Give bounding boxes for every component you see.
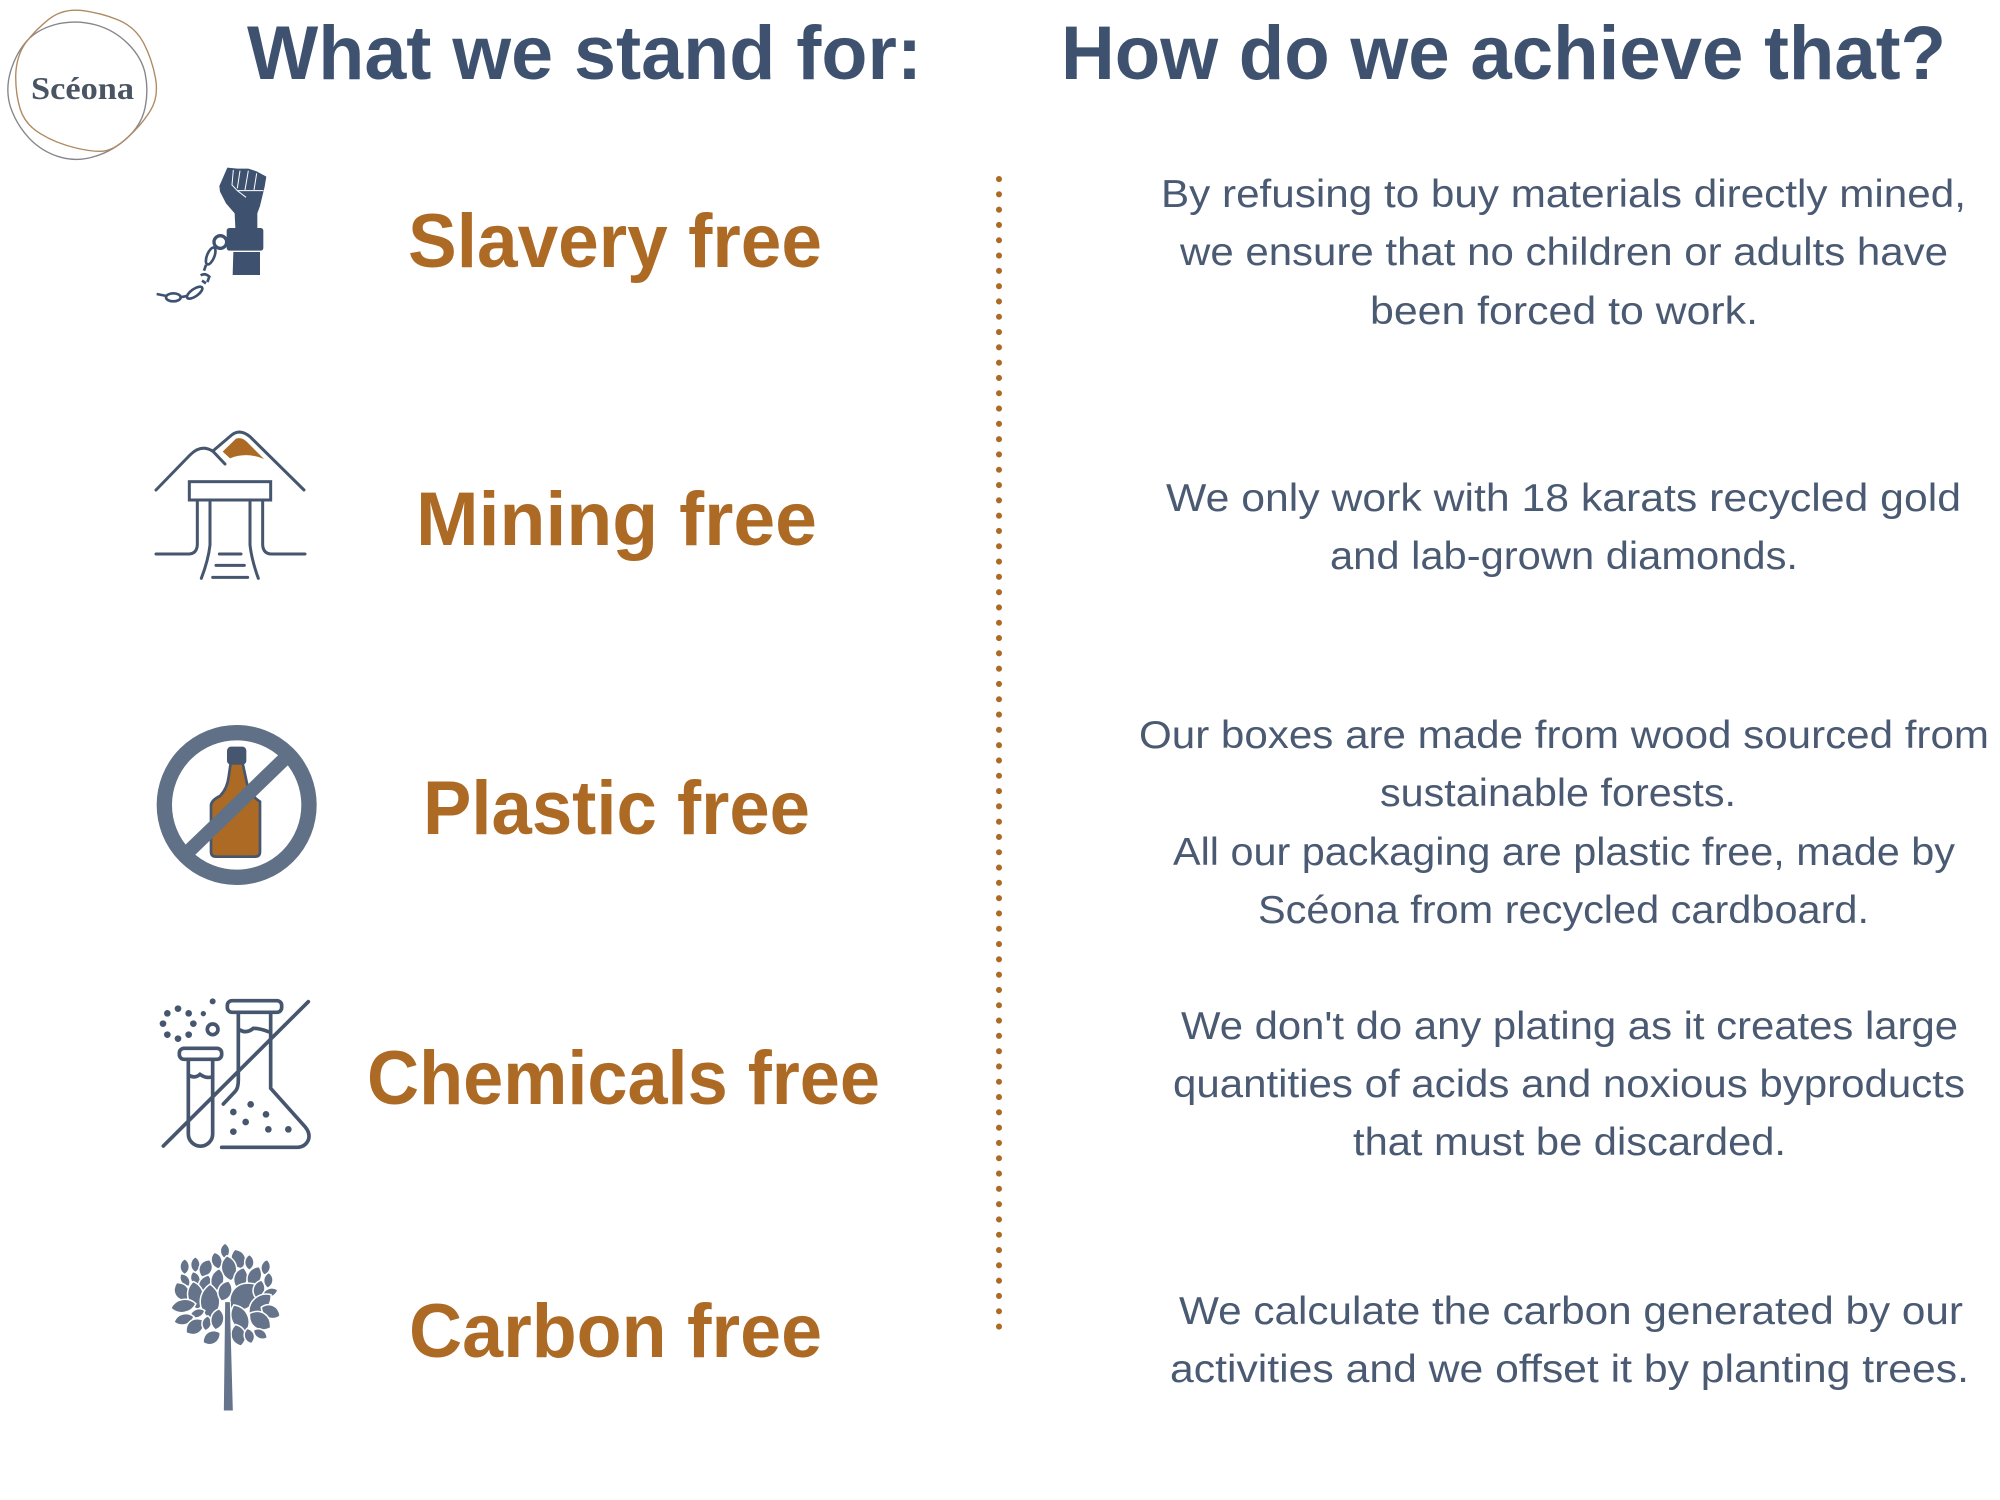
text: carbon free explanation: activities and we offset it by planting trees. <box>1170 1348 1969 1391</box>
text: chemicals free explanation <box>1173 1005 1965 1164</box>
text: chemicals free explanation: We don't do any plating as it creates large <box>1181 1005 1958 1048</box>
text: carbon free explanation <box>1170 1290 1969 1391</box>
text: plastic free explanation: Our boxes are made from wood sourced from <box>1139 714 1989 757</box>
text: mining free explanation <box>1166 477 1961 578</box>
text: plastic free explanation <box>1139 714 1989 932</box>
text: mining free explanation: We only work with 18 karats recycled gold <box>1166 477 1961 520</box>
icon: raised fist with shackle and chain <box>157 168 266 301</box>
text: plastic free explanation: All our packaging are plastic free, made by <box>1173 831 1956 874</box>
label: Mining free: Mining free <box>416 477 817 562</box>
text: mining free explanation: and lab-grown diamonds. <box>1330 535 1798 578</box>
logo: Scéona: Scéona <box>31 70 134 106</box>
label: Slavery free: Slavery free <box>408 199 822 284</box>
text: chemicals free explanation: quantities of acids and noxious byproducts <box>1173 1063 1965 1106</box>
text: plastic free explanation: sustainable forests. <box>1380 772 1736 815</box>
text: slavery free explanation: By refusing to buy materials directly mined, <box>1161 173 1966 216</box>
text: plastic free explanation: Scéona from recycled cardboard. <box>1258 889 1869 932</box>
text: slavery free explanation <box>1161 173 1966 333</box>
heading: What we stand for: What we stand for: <box>247 11 922 96</box>
divider: dotted vertical line <box>996 179 1002 1340</box>
label: Carbon free: Carbon free <box>409 1289 822 1374</box>
text: chemicals free explanation: that must be discarded. <box>1353 1121 1786 1164</box>
text: carbon free explanation: We calculate the carbon generated by our <box>1179 1290 1963 1333</box>
label: Chemicals free: Chemicals free <box>367 1036 880 1121</box>
text: slavery free explanation: we ensure that no children or adults have <box>1179 231 1948 274</box>
icon: mine <box>156 432 305 578</box>
icon: no chemicals flask and test tube <box>160 998 309 1147</box>
icon: tree <box>170 1243 283 1411</box>
icon: no plastic bottle <box>164 733 309 877</box>
heading: How do we achieve that: How do we achieve that? <box>1061 11 1946 96</box>
text: slavery free explanation: been forced to work. <box>1370 290 1758 333</box>
label: Plastic free: Plastic free <box>423 766 810 851</box>
logo: Scéona <box>8 10 156 159</box>
